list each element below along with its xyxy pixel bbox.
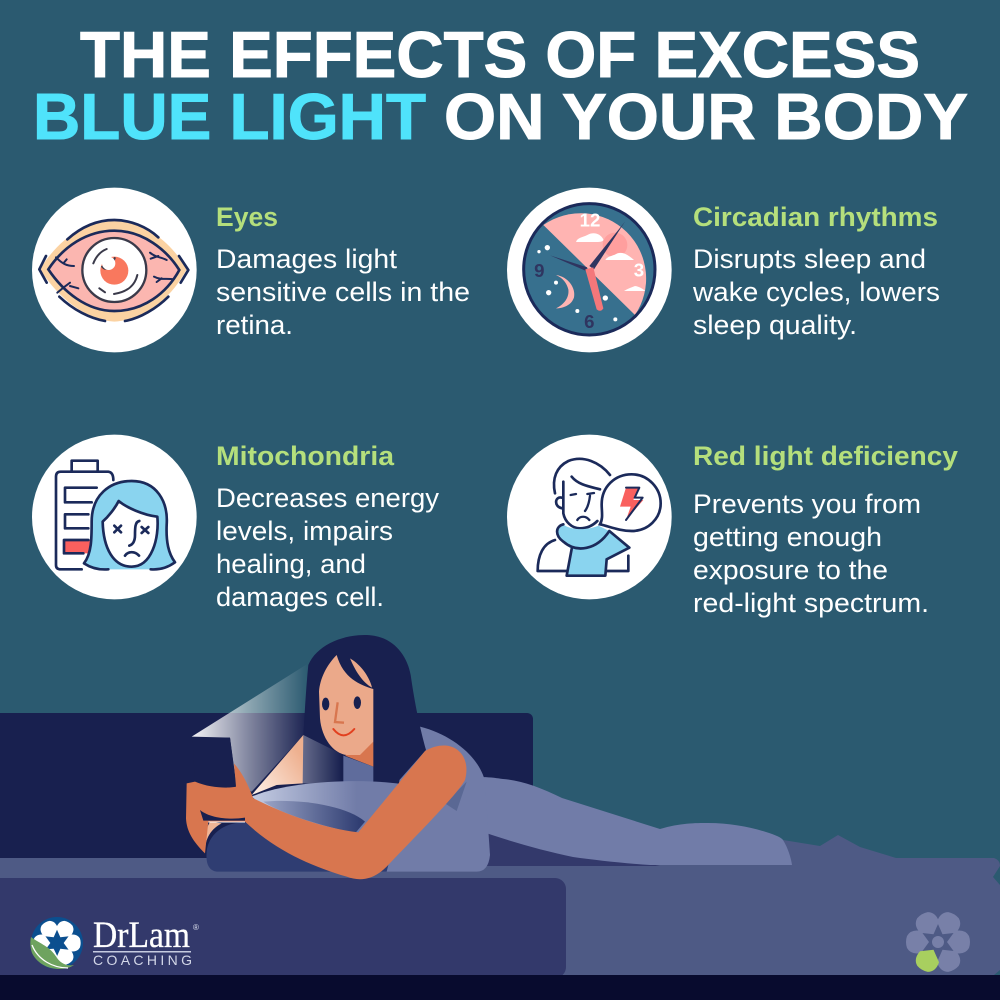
watermark flower — [906, 909, 970, 975]
lit chest — [252, 735, 303, 795]
logo: DrLam Coaching: DrLam — [93, 915, 190, 956]
forehead highlight — [350, 658, 372, 688]
eyes — [322, 696, 361, 710]
icon: low battery and tired woman — [32, 435, 197, 599]
pillow under arm — [252, 781, 414, 838]
heading and text: red light deficiency: getting enough — [693, 522, 882, 552]
logo: DrLam Coaching: ® — [193, 923, 199, 932]
smile — [333, 729, 354, 735]
heading and text: mitochondria: Mitochondria — [216, 441, 395, 471]
heading and text: circadian rhythms — [692, 202, 940, 340]
heading and text: mitochondria: levels, impairs — [216, 516, 393, 546]
heading and text: circadian rhythms: wake cycles, lowers — [692, 277, 940, 307]
logo: DrLam Coaching — [30, 915, 199, 969]
shaded pillow dome — [263, 801, 365, 833]
icon: day and night clock: 3 — [634, 259, 644, 280]
heading and text: circadian rhythms: sleep quality. — [693, 310, 857, 340]
shadow under blanket — [470, 825, 660, 866]
icon: unwell man with lightning speech bubble — [507, 435, 672, 599]
heading and text: mitochondria: Decreases energy — [216, 483, 439, 513]
title — [33, 18, 968, 153]
heading and text: red light deficiency: Prevents you from — [693, 489, 921, 519]
blanket over legs — [470, 777, 792, 870]
shirt — [343, 756, 373, 782]
heading and text: red light deficiency: exposure to the — [693, 555, 888, 585]
floor — [0, 975, 1000, 1000]
heading and text: circadian rhythms: Circadian rhythms — [693, 202, 938, 232]
title: ON YOUR BODY — [444, 80, 968, 153]
lit skin below hand — [202, 822, 222, 853]
heading and text: red light deficiency: red-light spectrum. — [693, 588, 929, 618]
heading and text: mitochondria: damages cell. — [216, 582, 384, 612]
light beam from phone — [192, 663, 308, 792]
lit hair — [301, 735, 343, 783]
icon: bloodshot eye — [32, 188, 197, 352]
heading and text: red light deficiency: Red light deficiency — [693, 441, 958, 471]
face — [319, 655, 373, 755]
icon: day and night clock — [507, 188, 672, 352]
dark pillow — [206, 822, 390, 872]
title: THE EFFECTS OF EXCESS — [80, 18, 920, 91]
heading and text: mitochondria — [216, 441, 439, 612]
heading and text: eyes — [216, 202, 470, 340]
mattress front panel — [0, 878, 566, 978]
icon: day and night clock: 12 — [580, 209, 600, 230]
bed — [0, 835, 1000, 975]
heading and text: eyes: Damages light — [216, 244, 398, 274]
icon: day and night clock: 6 — [584, 311, 595, 332]
heading and text: eyes: retina. — [216, 310, 293, 340]
arm and hand — [186, 746, 466, 879]
heading and text: eyes: Eyes — [216, 202, 278, 232]
nose — [335, 702, 344, 723]
logo: DrLam Coaching: COACHING — [93, 952, 192, 968]
title: BLUE LIGHT — [33, 80, 426, 153]
long dark hair — [301, 635, 426, 785]
heading and text: eyes: sensitive cells in the — [216, 277, 470, 307]
phone light edge — [208, 820, 245, 823]
headboard — [0, 713, 533, 873]
icon: day and night clock: 9 — [534, 260, 545, 281]
woman in bed using phone — [186, 635, 490, 879]
neck — [345, 742, 373, 767]
blanket behind shoulder — [383, 727, 490, 872]
heading and text: mitochondria: healing, and — [216, 549, 366, 579]
phone lower edge — [200, 810, 245, 821]
heading and text: red light deficiency — [693, 441, 958, 618]
phone — [193, 738, 236, 787]
heading and text: circadian rhythms: Disrupts sleep and — [693, 244, 926, 274]
blanket shadow — [445, 782, 467, 811]
logo flower badge — [30, 917, 83, 969]
